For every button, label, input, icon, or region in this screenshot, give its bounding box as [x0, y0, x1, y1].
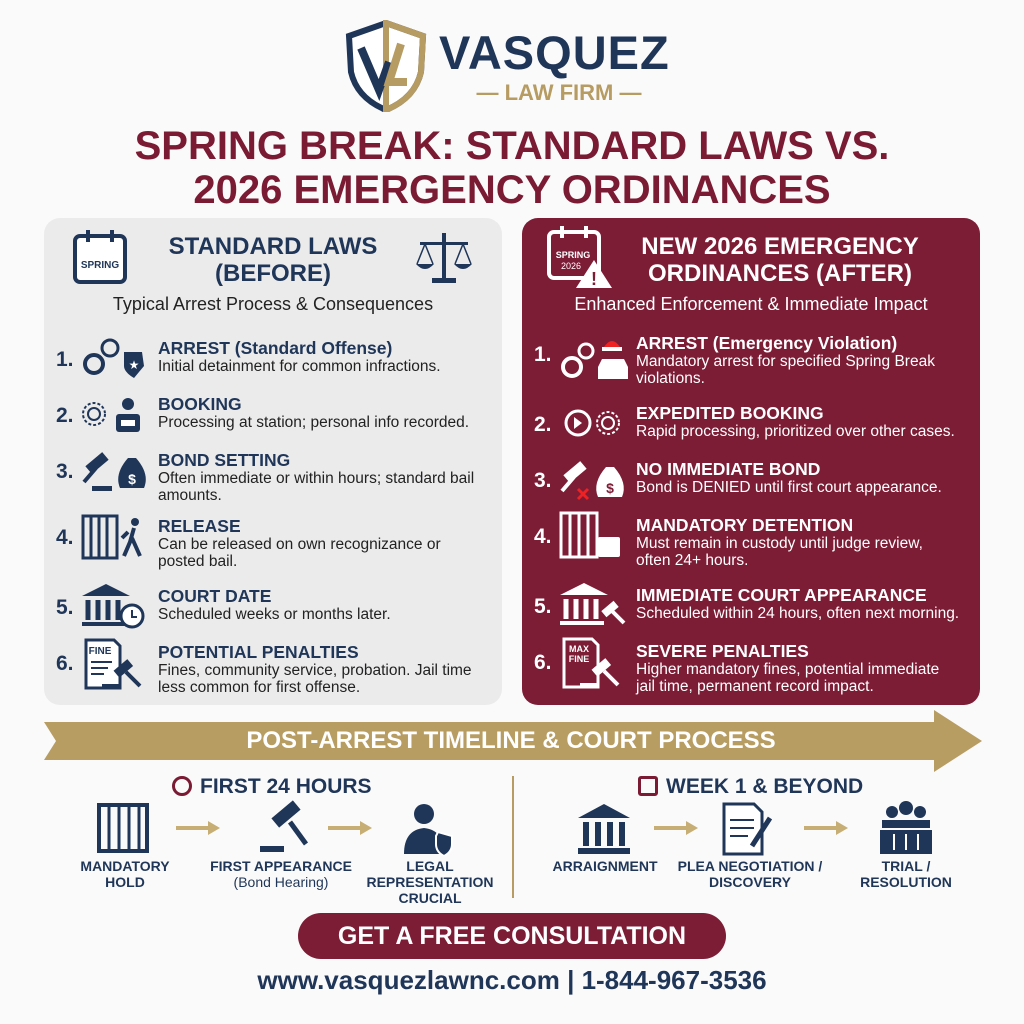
item 5: 5.: [56, 596, 74, 619]
heading: STANDARD LAWS: [169, 233, 377, 260]
heading: week 1: WEEK 1 & BEYOND: [666, 775, 863, 798]
timeline: first 24 hours: LEGAL: [406, 858, 454, 874]
item 2: Processing at station; personal info recorded.: [158, 414, 469, 431]
item 6: [56, 638, 472, 696]
item 1: Mandatory arrest for specified Spring Break violations.: [636, 353, 935, 387]
timeline: first 24 hours: [80, 775, 494, 906]
icon: shield: [346, 20, 426, 112]
item 3: [534, 459, 942, 500]
item 3: Often immediate or within hours; standard bail amounts.: [158, 470, 474, 504]
arrow: [328, 821, 372, 835]
item 1: Initial detainment for common infractions.: [158, 358, 441, 375]
arrow banner: [44, 710, 982, 772]
timeline: first 24 hours: CRUCIAL: [398, 890, 462, 906]
item 5: IMMEDIATE COURT APPEARANCE: [636, 585, 927, 605]
item 6: Higher mandatory fines, potential immediate jail time, permanent record impact.: [636, 661, 939, 695]
icon: trial: [880, 801, 932, 854]
item 2: EXPEDITED BOOKING: [636, 403, 824, 423]
item 6: [534, 638, 939, 695]
timeline: first 24 hours: REPRESENTATION: [366, 874, 494, 890]
subtitle: law firm: — LAW FIRM —: [476, 80, 641, 105]
title: 2026 EMERGENCY ORDINANCES: [193, 168, 831, 212]
timeline: first 24 hours: FIRST APPEARANCE: [210, 858, 352, 874]
item 3: BOND SETTING: [158, 450, 290, 470]
item 3: Bond is DENIED until first court appearance.: [636, 479, 942, 496]
item 3: $: [606, 480, 614, 496]
item 1: ARREST (Standard Offense): [158, 338, 392, 358]
item 5: [56, 584, 391, 628]
labels: [80, 858, 170, 890]
icon: spring calendar: SPRING: [81, 260, 119, 271]
item 2: 2.: [56, 404, 74, 427]
item 1: [534, 333, 935, 387]
item 4: 4.: [56, 526, 74, 549]
arrow banner: POST-ARREST TIMELINE & COURT PROCESS: [246, 727, 776, 754]
timeline: week 1 and beyond: TRIAL /: [882, 858, 930, 874]
icon: spring 2026 calendar warning: 2026: [561, 261, 581, 271]
item 1: ARREST (Emergency Violation): [636, 333, 897, 353]
item 2: [56, 394, 469, 432]
item 1: [56, 338, 441, 378]
item 4: [56, 514, 441, 570]
item 2: 2.: [534, 413, 552, 436]
item 6: SEVERE PENALTIES: [636, 641, 809, 661]
CTA button: GET A FREE CONSULTATION: [338, 922, 686, 950]
subheading: Enhanced Enforcement & Immediate Impact: [574, 294, 928, 314]
item 6: FINE: [89, 646, 112, 657]
item 3: 3.: [534, 469, 552, 492]
item 6: 6.: [56, 652, 74, 675]
icon: lawyer: [404, 804, 451, 855]
subheading: Typical Arrest Process & Consequences: [113, 294, 433, 314]
icon: scales: [416, 233, 472, 283]
logo: [346, 20, 670, 112]
item 2: [534, 403, 955, 440]
heading: ORDINANCES (AFTER): [648, 260, 912, 287]
item 5: Scheduled within 24 hours, often next morning.: [636, 605, 959, 622]
item 5: [534, 583, 959, 625]
item 3: NO IMMEDIATE BOND: [636, 459, 820, 479]
arrow: [176, 821, 220, 835]
item 4: MANDATORY DETENTION: [636, 515, 853, 535]
item 2: Rapid processing, prioritized over other cases.: [636, 423, 955, 440]
item 4: [534, 512, 923, 569]
timeline: week 1 and beyond: DISCOVERY: [709, 874, 791, 890]
heading: [169, 233, 377, 287]
item 6: MAX: [569, 644, 589, 654]
item 1: ★: [129, 358, 139, 372]
item 4: Can be released on own recognizance or posted bail.: [158, 536, 441, 570]
heading: first 24 hours: FIRST 24 HOURS: [200, 775, 372, 798]
CTA button: [298, 913, 726, 959]
item 4: RELEASE: [158, 516, 241, 536]
arrow: [804, 821, 848, 835]
item 1: 1.: [534, 343, 552, 366]
item 1: 1.: [56, 348, 74, 371]
title: SPRING BREAK: STANDARD LAWS VS.: [135, 124, 889, 168]
panel: emergency ordinances: [522, 218, 980, 705]
title: [135, 124, 889, 212]
panel: standard laws: [44, 218, 502, 705]
item 6: FINE: [569, 654, 589, 664]
item 3: 3.: [56, 460, 74, 483]
item 5: COURT DATE: [158, 586, 271, 606]
item 3: $: [128, 471, 136, 487]
item 3: [56, 450, 474, 504]
item 5: Scheduled weeks or months later.: [158, 606, 391, 623]
icon: spring calendar: [73, 230, 127, 284]
timeline: week 1 and beyond: RESOLUTION: [860, 874, 952, 890]
icon: jail: [97, 803, 149, 853]
item 6: POTENTIAL PENALTIES: [158, 642, 359, 662]
contact line: www.vasquezlawnc.com | 1-844-967-3536: [257, 965, 767, 995]
item 4: 4.: [534, 525, 552, 548]
heading: NEW 2026 EMERGENCY: [641, 233, 919, 260]
item 6: Fines, community service, probation. Jail time less common for first offense.: [158, 662, 472, 696]
icon: spring 2026 calendar warning: [547, 226, 612, 289]
timeline: week 1 and beyond: PLEA NEGOTIATION /: [678, 858, 822, 874]
timeline: first 24 hours: (Bond Hearing): [234, 874, 328, 890]
heading: [641, 233, 919, 287]
item 5: 5.: [534, 595, 552, 618]
heading: (BEFORE): [215, 260, 331, 287]
timeline: week 1 and beyond: ARRAIGNMENT: [552, 858, 658, 874]
item 2: BOOKING: [158, 394, 242, 414]
icon: courthouse: [578, 804, 630, 854]
brand name: VASQUEZ: [439, 26, 670, 79]
item 6: 6.: [534, 651, 552, 674]
arrow: [654, 821, 698, 835]
labels: HOLD: [105, 874, 145, 890]
icon: document: [722, 802, 772, 856]
timeline: week 1 and beyond: [552, 775, 952, 890]
icon: spring 2026 calendar warning: !: [591, 269, 597, 289]
icon: gavel: [260, 800, 308, 852]
item 4: Must remain in custody until judge review, often 24+ hours.: [636, 535, 923, 569]
icon: spring 2026 calendar warning: SPRING: [556, 250, 590, 260]
labels: MANDATORY: [80, 858, 170, 874]
